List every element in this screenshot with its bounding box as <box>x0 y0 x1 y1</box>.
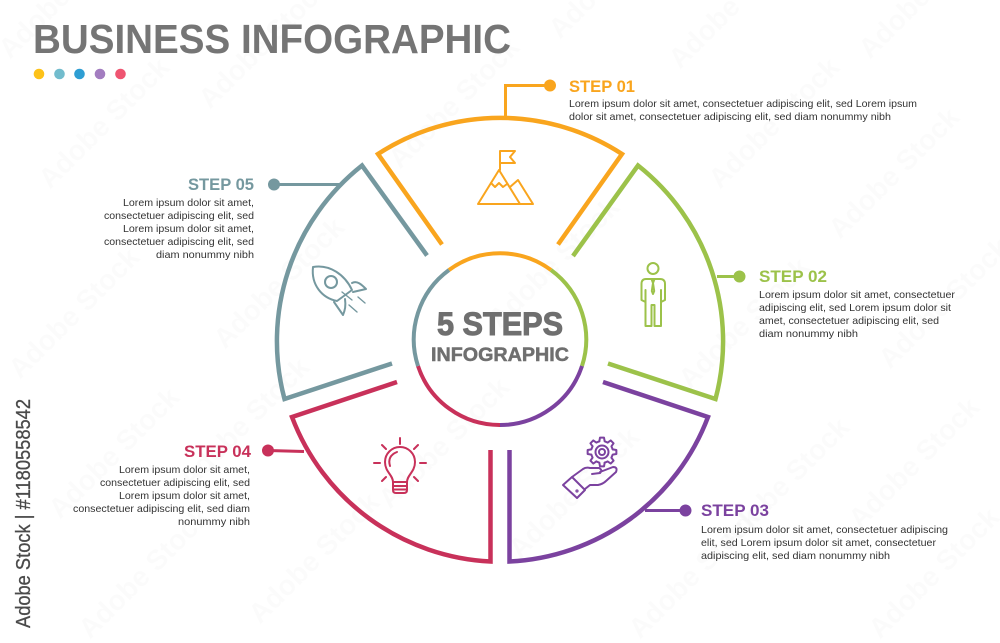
panel: step 02 <box>573 166 956 399</box>
title: BUSINESS INFOGRAPHIC <box>33 16 511 62</box>
panel: step 01 <box>378 78 917 244</box>
body text: Lorem ipsum dolor sit amet, <box>123 223 254 235</box>
heading: STEP 02 <box>759 268 827 286</box>
icon: hand holding gear <box>563 438 617 498</box>
connector with dot <box>717 270 746 282</box>
body text <box>73 464 250 528</box>
icon: rocket <box>313 267 366 315</box>
body text <box>759 289 956 340</box>
heading: STEP 03 <box>701 502 769 520</box>
decorative colour dots row <box>34 69 126 79</box>
body text: elit, sed Lorem ipsum dolor sit amet, consectetuer <box>701 537 937 549</box>
icon: businessman <box>642 263 665 326</box>
body text: consectetuer adipiscing elit, sed <box>104 210 254 222</box>
heading: STEP 05 <box>188 176 254 194</box>
segment outline <box>277 166 427 399</box>
ring segment: red <box>418 366 500 425</box>
body text: diam nonummy nibh <box>759 328 858 340</box>
body text: diam nonummy nibh <box>156 249 254 261</box>
segment outline <box>573 166 723 399</box>
ring segment: purple <box>500 366 582 425</box>
body text: Lorem ipsum dolor sit amet, <box>119 490 250 502</box>
body text: dolor sit amet, consectetuer adipiscing elit, sed diam nonummy nibh <box>569 111 891 123</box>
body text <box>701 524 948 562</box>
body text: nonummy nibh <box>178 516 250 528</box>
center subheading: infographic: INFOGRAPHIC <box>431 344 569 366</box>
body text: amet, consectetuer adipiscing elit, sed <box>759 315 939 327</box>
center circle with title <box>414 253 586 425</box>
connector with dot <box>262 444 304 456</box>
body text <box>569 98 917 123</box>
body text: Lorem ipsum dolor sit amet, <box>123 197 254 209</box>
body text: Lorem ipsum dolor sit amet, consectetuer adipiscing elit, sed Lorem ipsum <box>569 98 917 110</box>
icon: mountain with flag <box>478 151 533 204</box>
connector with dot <box>506 80 556 117</box>
segment outline <box>378 118 622 244</box>
ring segment: slate <box>414 270 449 366</box>
ring segment: orange <box>449 253 551 270</box>
panel: step 05 <box>104 166 427 399</box>
body text <box>104 197 254 261</box>
body text: consectetuer adipiscing elit, sed <box>104 236 254 248</box>
center heading: 5 steps: 5 STEPS <box>437 306 563 342</box>
heading: STEP 01 <box>569 78 635 96</box>
body text: adipiscing elit, sed diam nonummy nibh <box>701 550 890 562</box>
panel: step 04 <box>73 382 490 562</box>
body text: Lorem ipsum dolor sit amet, consectetuer adipiscing <box>701 524 948 536</box>
stock image id label: Adobe Stock | #1180558542 <box>13 399 35 628</box>
body text: Lorem ipsum dolor sit amet, consectetuer <box>759 289 956 301</box>
body text: adipiscing elit, sed Lorem ipsum dolor sit <box>759 302 951 314</box>
icon: light bulb <box>374 438 426 493</box>
connector with dot <box>645 504 692 516</box>
panel: step 03 <box>510 382 948 562</box>
body text: Lorem ipsum dolor sit amet, <box>119 464 250 476</box>
heading: STEP 04 <box>184 443 252 461</box>
body text: consectetuer adipiscing elit, sed <box>100 477 250 489</box>
body text: consectetuer adipiscing elit, sed diam <box>73 503 250 515</box>
segment outline <box>292 382 490 562</box>
segment outline <box>510 382 708 562</box>
connector with dot <box>268 178 342 190</box>
ring segment: green <box>551 270 586 366</box>
